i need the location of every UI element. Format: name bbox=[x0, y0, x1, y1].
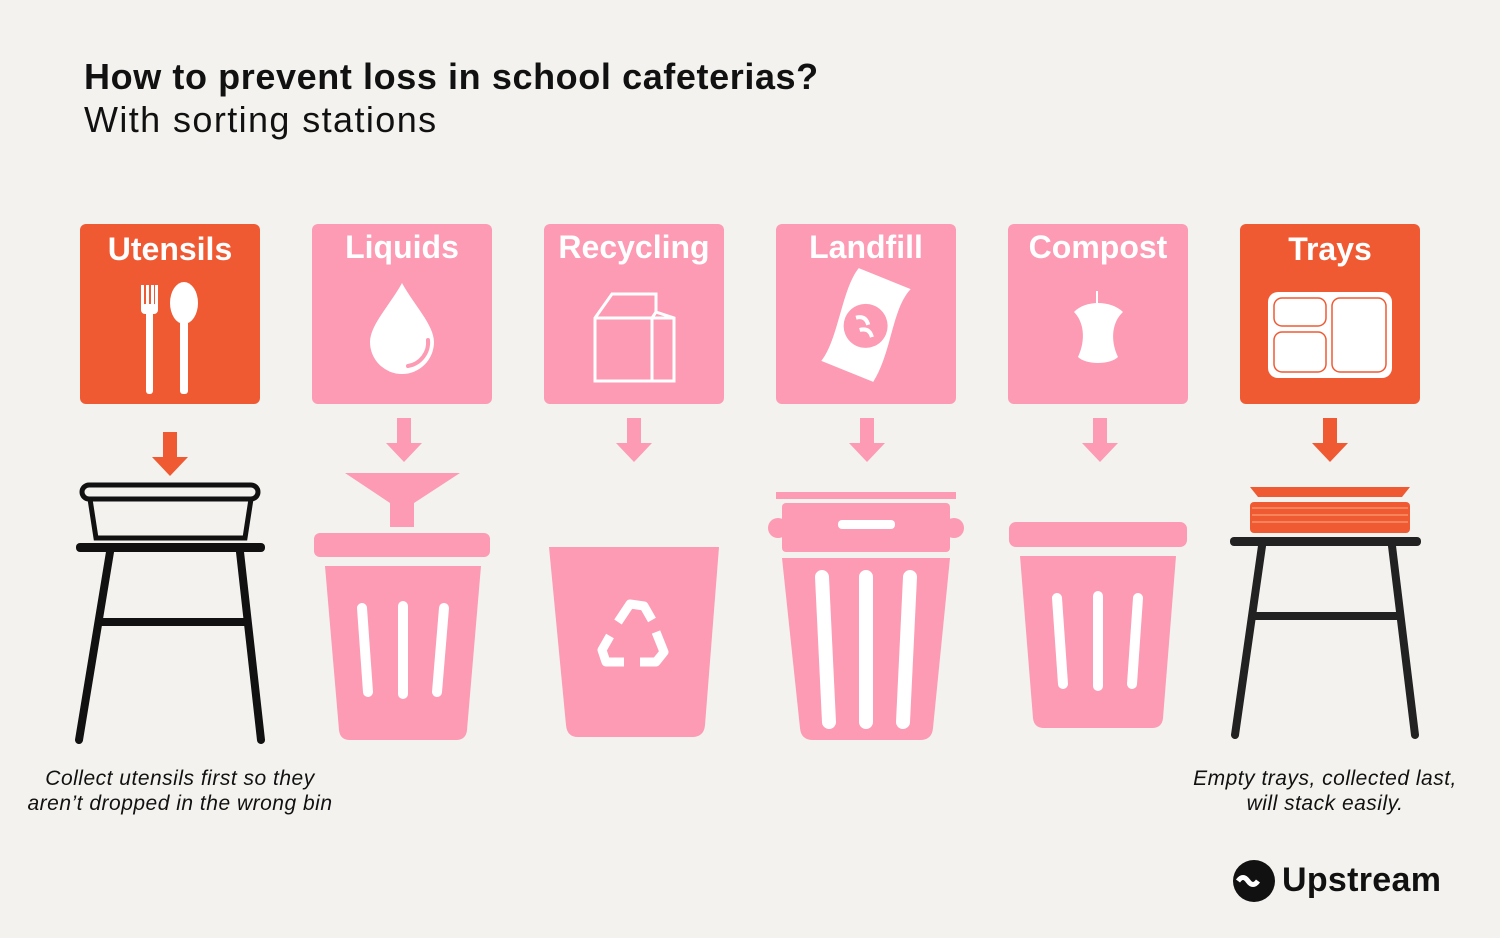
panel: recycling: Recycling bbox=[558, 229, 710, 265]
landfill bin bbox=[768, 492, 964, 740]
caption: utensils bbox=[27, 767, 333, 815]
tray stand bbox=[1230, 487, 1421, 735]
panel: landfill: Landfill bbox=[809, 229, 923, 265]
panel: trays bbox=[1240, 224, 1420, 404]
icon: fork and spoon bbox=[141, 282, 198, 394]
icon: tray bbox=[1268, 292, 1392, 378]
caption: trays bbox=[1193, 767, 1457, 815]
panel: utensils bbox=[80, 224, 260, 404]
caption: utensils: aren’t dropped in the wrong bin bbox=[27, 792, 333, 815]
logo bbox=[1233, 860, 1441, 902]
caption: trays: will stack easily. bbox=[1247, 792, 1403, 815]
title: How to prevent loss in school cafeterias? bbox=[84, 56, 819, 97]
compost bin bbox=[1009, 522, 1187, 728]
icon: drop bbox=[370, 283, 434, 374]
caption: utensils: Collect utensils first so they bbox=[45, 767, 315, 790]
arrows bbox=[152, 418, 1348, 476]
subtitle: With sorting stations bbox=[84, 99, 438, 140]
panel: utensils: Utensils bbox=[108, 231, 232, 267]
caption: trays: Empty trays, collected last, bbox=[1193, 767, 1457, 790]
logo: Upstream bbox=[1282, 861, 1441, 899]
utensil stand bbox=[76, 485, 265, 740]
recycling bin bbox=[549, 547, 719, 737]
icon: apple core bbox=[1074, 291, 1123, 363]
panel: liquids bbox=[312, 224, 492, 404]
icon: milk carton bbox=[595, 294, 674, 381]
liquids bin with funnel bbox=[314, 473, 490, 740]
icon: chip bag bbox=[819, 267, 912, 382]
panel: compost bbox=[1008, 224, 1188, 404]
panel: compost: Compost bbox=[1029, 229, 1168, 265]
panel: trays: Trays bbox=[1288, 231, 1372, 267]
panel: landfill bbox=[776, 224, 956, 404]
icon: recycle symbol bbox=[602, 604, 664, 662]
panel: liquids: Liquids bbox=[345, 229, 459, 265]
panel: recycling bbox=[544, 224, 724, 404]
